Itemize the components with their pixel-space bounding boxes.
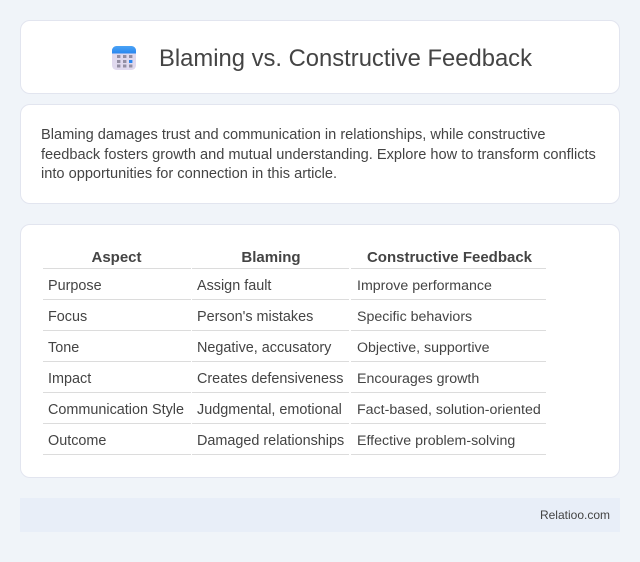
title: Blaming vs. Constructive Feedback xyxy=(159,45,532,72)
table header: Aspect xyxy=(91,249,142,266)
table row: Tone xyxy=(48,340,489,356)
panel: title card xyxy=(20,20,620,94)
table row: Communication Style: Communication Style xyxy=(48,402,184,418)
table row: Impact: Creates defensiveness xyxy=(197,371,343,387)
footer bar xyxy=(20,498,620,532)
table row: Impact: Encourages growth xyxy=(357,371,479,387)
icon: calendar xyxy=(112,46,136,70)
table row: Purpose xyxy=(48,278,492,294)
table row: Tone: Objective, supportive xyxy=(357,340,489,356)
table row: Communication Style: Judgmental, emotional xyxy=(197,402,342,418)
table row: Purpose: Improve performance xyxy=(357,278,492,294)
table row: Focus: Focus xyxy=(48,309,87,325)
footer brand: Relatioo.com xyxy=(540,508,610,522)
table row: Focus: Specific behaviors xyxy=(357,309,472,325)
table row: Communication Style xyxy=(48,402,541,418)
table row: Communication Style: Fact-based, solution-oriented xyxy=(357,402,541,418)
table row: Focus: Person's mistakes xyxy=(197,309,313,325)
intro paragraph: into opportunities for connection in this article. xyxy=(41,166,337,182)
table row: Impact: Impact xyxy=(48,371,91,387)
table row: Impact xyxy=(48,371,479,387)
table header: Constructive Feedback xyxy=(367,249,532,266)
table row: Outcome: Effective problem-solving xyxy=(357,433,515,449)
intro paragraph xyxy=(41,127,596,182)
table row: Purpose: Assign fault xyxy=(197,278,271,294)
table header: Blaming xyxy=(241,249,301,266)
table row: Outcome: Damaged relationships xyxy=(197,433,344,449)
table row: Tone: Tone xyxy=(48,340,79,356)
table row: Tone: Negative, accusatory xyxy=(197,340,331,356)
intro paragraph: feedback fosters growth and mutual understanding. Explore how to transform conflicts xyxy=(41,147,596,163)
table header xyxy=(91,249,532,266)
table row: Purpose: Purpose xyxy=(48,278,102,294)
panel: intro text xyxy=(20,104,620,204)
panel: comparison table xyxy=(20,224,620,478)
table row: Outcome xyxy=(48,433,515,449)
table row: Focus xyxy=(48,309,472,325)
table row: Outcome: Outcome xyxy=(48,433,106,449)
intro paragraph: Blaming damages trust and communication in relationships, while constructive xyxy=(41,127,546,143)
